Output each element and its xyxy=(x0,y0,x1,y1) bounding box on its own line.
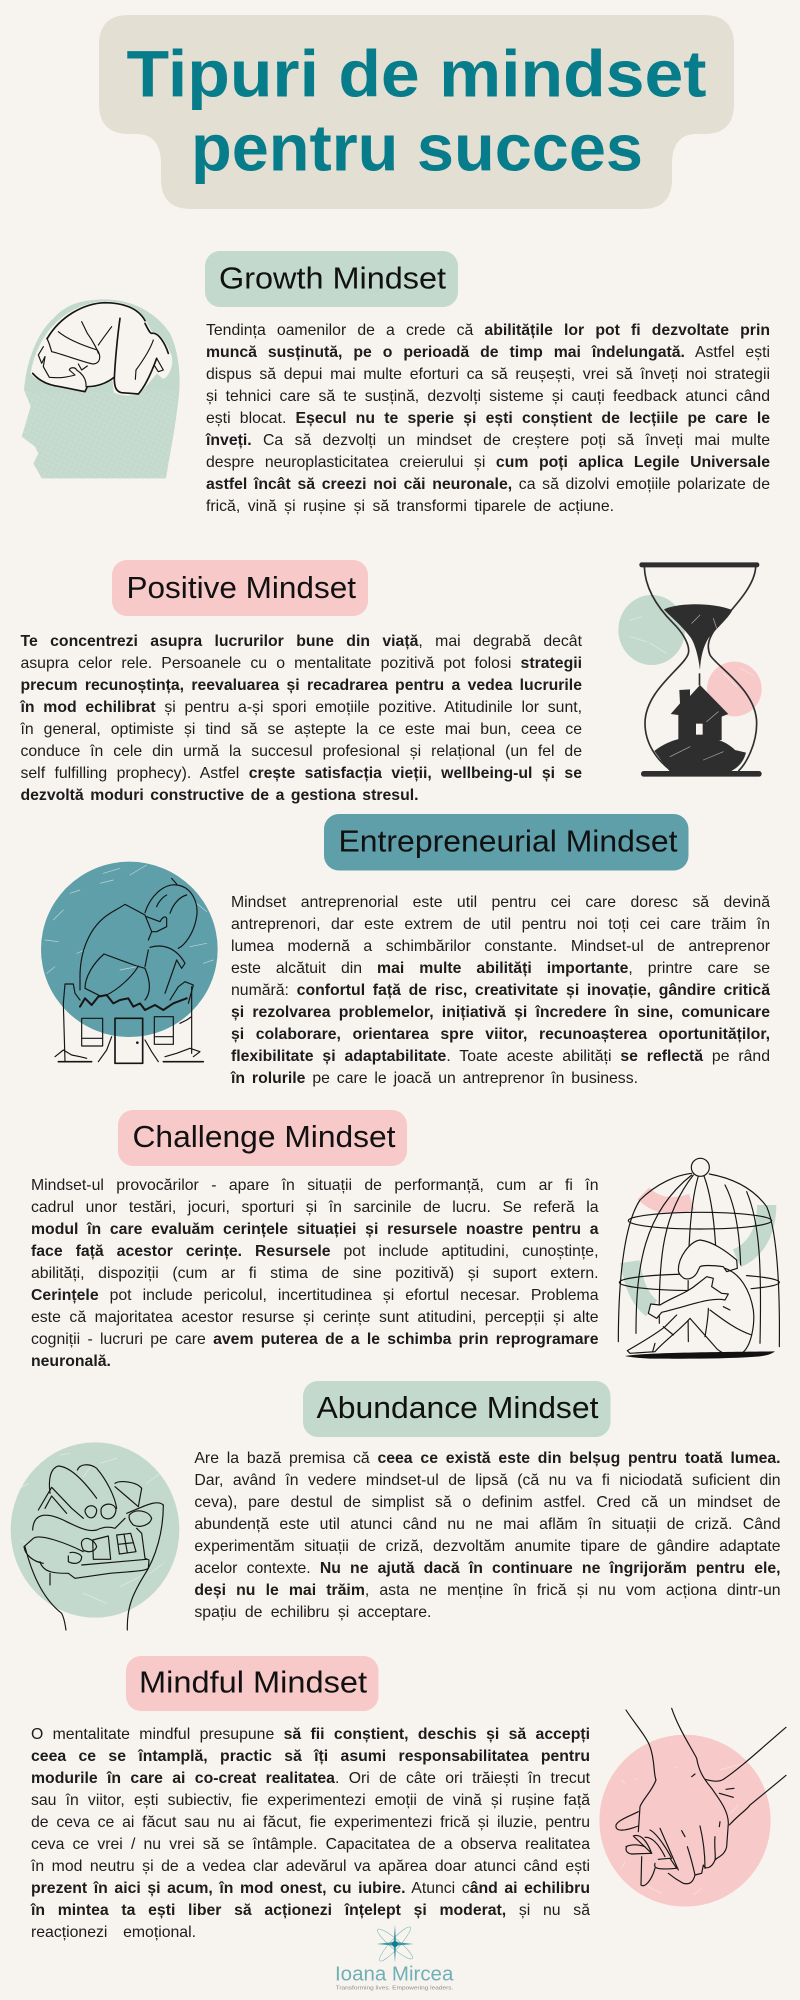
text block: abundance: Dar, având în vedere mindset-ul de lipsă (că nu va fi niciodată suficient din xyxy=(194,1472,781,1489)
heading: growth mindset xyxy=(205,251,458,307)
text block: mindful: O mentalitate mindful presupune să fii conștient, deschis și să accepți xyxy=(31,1726,590,1743)
panel: positive mindset xyxy=(20,560,762,804)
text block: growth: dispus să depui mai multe eforturi ca să reușești, vrei să înveți noi strategii xyxy=(206,366,770,383)
text block: entrepreneurial: numără: confortul față de risc, creativitate și inovație, gândire critică xyxy=(231,982,770,999)
icon: head with curled figure xyxy=(22,299,180,478)
text block: challenge: cadrul unor testări, jocuri, sporturi și în sarcinile de lucru. Se referă la xyxy=(31,1199,598,1216)
text block: mindful: reacționezi emoțional. xyxy=(31,1924,196,1941)
text block: challenge xyxy=(31,1177,599,1370)
heading: positive mindset xyxy=(112,560,368,616)
icon: figure on a house xyxy=(41,862,218,1064)
text block: growth: muncă susținută, pe o perioadă de timp mai îndelungată. Astfel ești xyxy=(206,344,770,361)
text block: challenge: Mindset-ul provocărilor - apare în situații de performanță, cum ar fi în xyxy=(31,1177,598,1194)
title xyxy=(99,15,734,209)
text block: challenge: cogniții - lucruri pe care avem puterea de a le schimba prin reprogramare xyxy=(31,1331,598,1348)
text block: abundance: abundență este util atunci când nu ne mai aflăm în situații de criză. Când xyxy=(194,1516,781,1533)
text block: challenge: abilități, dispoziții (cum ar fi stima de sine pozitivă) și suport extern. xyxy=(31,1265,598,1282)
text block: challenge: este că majoritatea acestor resurse și cerințe sunt atitudini, percepții și alte xyxy=(31,1309,598,1326)
text block: entrepreneurial: antreprenori, dar este extrem de util pentru noi toți cei care trăim în xyxy=(231,916,770,933)
logo: Ioana Mircea xyxy=(335,1925,454,1991)
title: pentru succes xyxy=(191,110,643,184)
panel: abundance mindset xyxy=(10,1381,781,1631)
text block: positive: în mod echilibrat și pentru a-și spori emoțiile pozitive. Atitudinile lor sunt, xyxy=(20,699,582,716)
text block: challenge: Cerințele pot include pericolul, incertitudinea și efortul necesar. Problema xyxy=(31,1287,598,1304)
heading: challenge mindset: Challenge Mindset xyxy=(132,1119,396,1154)
text block: growth: Tendința oamenilor de a crede că abilitățile lor pot fi dezvoltate prin xyxy=(206,322,770,339)
text block: abundance: spațiu de echilibru și acceptare. xyxy=(194,1604,431,1621)
text block: mindful: în mintea ta ești liber să acționezi înțelept și moderat, și nu să xyxy=(31,1902,590,1919)
text block: positive: conduce în cele din urmă la succesul profesional și relațional (un fel de xyxy=(20,743,582,760)
heading: entrepreneurial mindset xyxy=(324,814,688,870)
text block: positive: în general, optimiste și tind să se aștepte la ce este mai bun, ceea ce xyxy=(20,721,582,738)
text block: entrepreneurial: lumea modernă a schimbărilor constante. Mindset-ul de antreprenor xyxy=(231,938,770,955)
heading: growth mindset: Growth Mindset xyxy=(219,261,446,296)
text block: positive xyxy=(20,633,582,804)
text block: positive: dezvoltă moduri constructive de a gestiona stresul. xyxy=(20,787,418,804)
text block: positive: asupra celor rele. Persoanele cu o mentalitate pozitivă pot folosi strategii xyxy=(20,655,582,672)
title: Tipuri de mindset xyxy=(126,36,707,110)
text block: growth: înveți. Ca să dezvolți un mindset de creștere poți să înveți mai multe xyxy=(206,432,770,449)
text block: entrepreneurial: flexibilitate și adaptabilitate. Toate aceste abilități se reflectă pe rând xyxy=(231,1048,770,1065)
icon: figure in a birdcage xyxy=(618,1158,780,1359)
text block: mindful: ceea ce se întamplă, practic să îți asumi responsabilitatea pentru xyxy=(31,1748,590,1765)
text block: entrepreneurial: Mindset antreprenorial este util pentru cei care doresc să devină xyxy=(231,894,770,911)
heading: mindful mindset xyxy=(126,1656,378,1711)
text block: entrepreneurial xyxy=(230,894,770,1087)
heading: abundance mindset xyxy=(303,1381,610,1437)
text block: abundance: Are la bază premisa că ceea ce există este din belșug pentru toată lumea. xyxy=(194,1450,781,1467)
text block: mindful: sau în viitor, ești subiectiv, fie experimentezi emoții de vină și rușine față xyxy=(31,1792,590,1809)
text block: challenge: neuronală. xyxy=(31,1353,111,1370)
icon: hand holding a house xyxy=(10,1442,180,1631)
text block: abundance: acelor contexte. Nu ne ajută dacă în continuare ne îngrijorăm pentru ele, xyxy=(194,1560,781,1577)
panel: entrepreneurial mindset xyxy=(41,814,770,1087)
panel: mindful mindset xyxy=(30,1656,787,1941)
text block: growth: astfel încât să creezi noi căi neuronale, ca să dizolvi emoțiile polarizate de xyxy=(206,476,770,493)
text block: positive: self fulfilling prophecy). Astfel crește satisfacția vieții, wellbeing-ul și se xyxy=(20,765,582,782)
text block: mindful: ceva ce vrei / nu vrei să se întâmple. Capacitatea de a observa realitatea xyxy=(31,1836,590,1853)
logo: Ioana Mircea: Ioana Mircea xyxy=(335,1964,454,1986)
text block: mindful xyxy=(30,1726,590,1941)
text block: abundance: ceva), pare destul de simplist să o definim astfel. Cred că un mindset de xyxy=(194,1494,781,1511)
text block: growth: frică, vină și rușine și să transformi tiparele de acțiune. xyxy=(206,498,614,515)
text block: growth xyxy=(205,322,770,515)
text block: entrepreneurial: și colaborare, orientarea spre viitor, recunoașterea oportunităților, xyxy=(231,1026,770,1043)
heading: positive mindset: Positive Mindset xyxy=(126,570,356,605)
text block: challenge: face față acestor cerințe. Resursele pot include aptitudini, cunoștințe, xyxy=(31,1243,598,1260)
text block: mindful: în mod neutru și de a vedea clar adevărul va apărea doar atunci când ești xyxy=(31,1858,590,1875)
logo: Ioana Mircea: Transforming lives. Empowering leaders. xyxy=(336,1985,453,1991)
text block: mindful: de ceva ce ai făcut sau nu ai făcut, fie experimentezi frică și iluzie, pentru xyxy=(31,1814,590,1831)
text block: growth: și tehnici care să te susțină, dezvolți sisteme și cauți feedback atunci când xyxy=(206,388,770,405)
text block: entrepreneurial: și rezolvarea problemelor, inițiativă și încredere în sine, comunicare xyxy=(231,1004,770,1021)
panel: growth mindset xyxy=(22,251,770,515)
text block: entrepreneurial: în rolurile pe care le joacă un antreprenor în business. xyxy=(231,1070,638,1087)
icon: holding hands xyxy=(599,1708,787,1907)
text block: mindful: modurile în care ai co-creat realitatea. Ori de câte ori trăiești în trecut xyxy=(31,1770,590,1787)
text block: abundance: experimentăm situații de criză, dezvoltăm anumite tipare de gândire adaptate xyxy=(194,1538,781,1555)
text block: mindful: prezent în aici și acum, în mod onest, cu iubire. Atunci când ai echilibru xyxy=(31,1880,590,1897)
text block: abundance: deși nu le mai trăim, asta ne menține în frică și nu vom acționa dintr-un xyxy=(194,1582,781,1599)
icon: hourglass with house xyxy=(618,562,762,777)
heading: entrepreneurial mindset: Entrepreneurial Mindset xyxy=(338,824,677,859)
text block: positive: Te concentrezi asupra lucrurilor bune din viață, mai degrabă decât xyxy=(20,633,582,650)
text block: positive: precum recunoștința, reevaluarea și recadrarea pentru a vedea lucrurile xyxy=(20,677,582,694)
text block: growth: despre neuroplasticitatea creierului și cum poți aplica Legile Universale xyxy=(206,454,770,471)
text block: abundance xyxy=(194,1450,781,1621)
text block: growth: ești blocat. Eșecul nu te sperie și ești conștient de lecțiile pe care le xyxy=(206,410,770,427)
panel: challenge mindset xyxy=(31,1110,780,1370)
text block: challenge: modul în care evaluăm cerințele situației și resursele noastre pentru a xyxy=(31,1221,598,1238)
text block: entrepreneurial: este alcătuit din mai multe abilități importante, printre care se xyxy=(231,960,770,977)
heading: abundance mindset: Abundance Mindset xyxy=(316,1390,598,1425)
heading: mindful mindset: Mindful Mindset xyxy=(139,1665,367,1700)
heading: challenge mindset xyxy=(118,1110,407,1166)
